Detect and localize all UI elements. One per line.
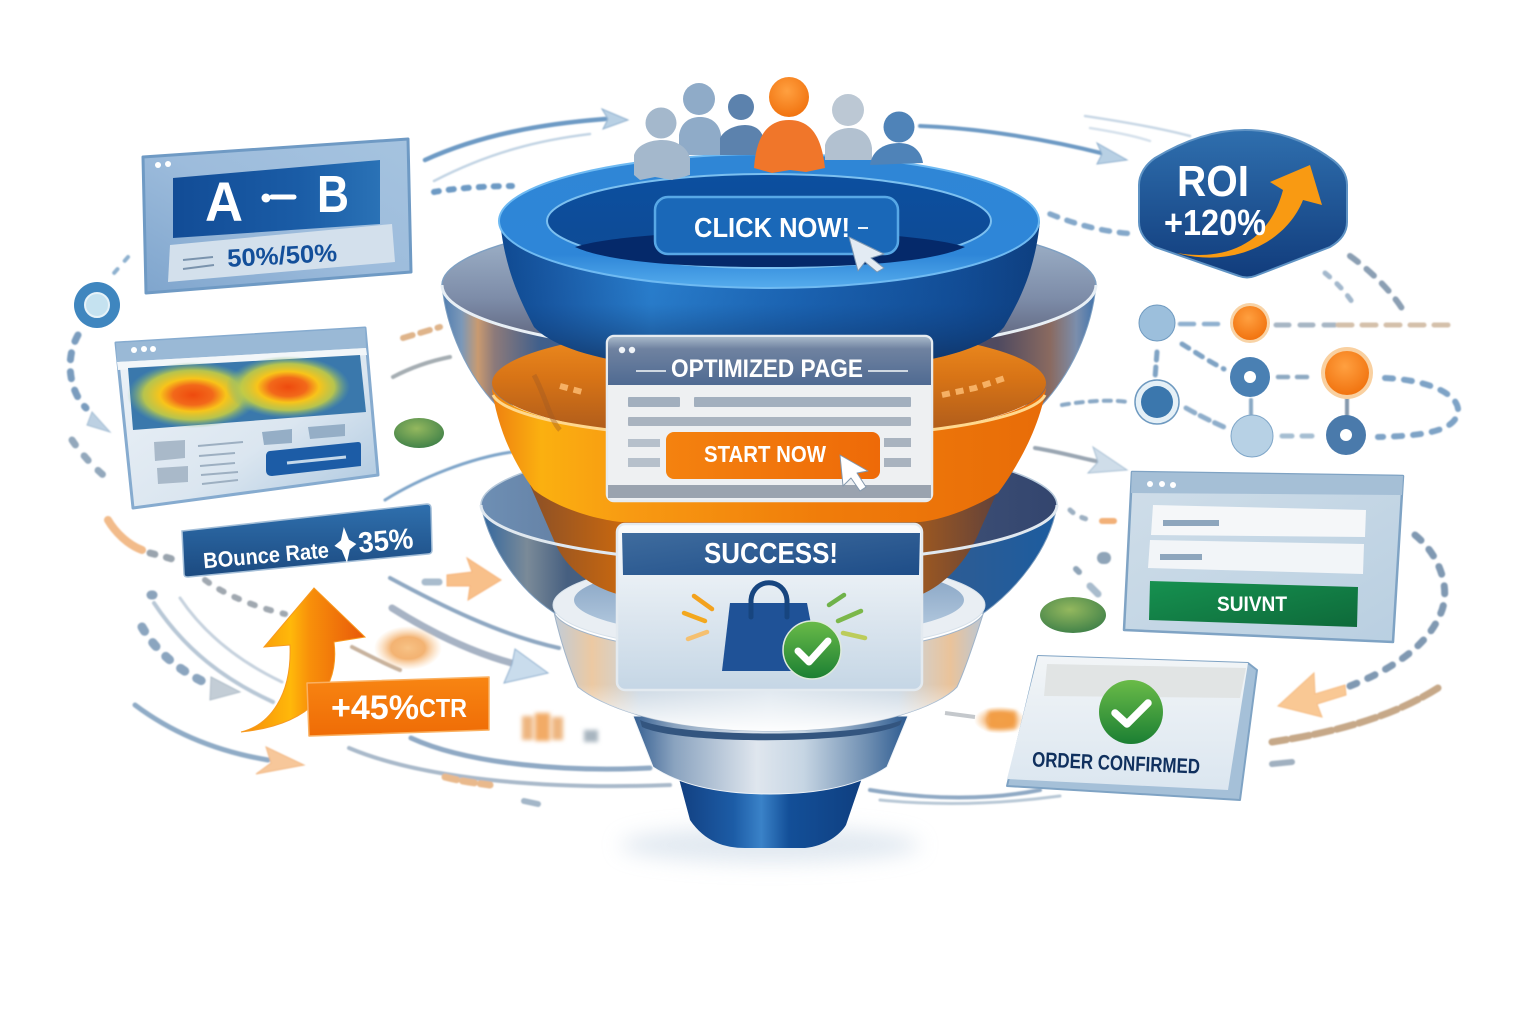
- button: submit: SUIVNT: [1217, 593, 1287, 616]
- arrow: crowd to ROI: [920, 116, 1403, 310]
- panel: form submit: [1124, 472, 1403, 642]
- funnel lower glass ring: [481, 443, 1057, 633]
- panel: heatmap page: [116, 328, 378, 508]
- heatmap: [127, 355, 366, 430]
- button: start now: [666, 432, 880, 491]
- funnel upper glass ring: [442, 215, 1096, 405]
- glow accents and data blocks: [374, 626, 1026, 742]
- panel: A/B test: [143, 139, 411, 293]
- panel: order confirmed: ORDER CONFIRMED: [1032, 748, 1200, 779]
- shadow under funnel: [620, 827, 920, 863]
- badge: CTR: CTR: [419, 693, 467, 723]
- dashed paths: right network: [870, 324, 1458, 803]
- card: success: SUCCESS!: [704, 538, 838, 570]
- button: click now: [655, 197, 898, 272]
- crowd of people: [634, 77, 923, 180]
- arrow: orange growth: [241, 588, 365, 732]
- panel: A/B test: A: [205, 170, 243, 233]
- card: optimized page: [607, 336, 932, 501]
- badge: bounce rate: 35%: [357, 523, 415, 560]
- panel: A/B test: B: [317, 166, 349, 224]
- funnel white bowl: [553, 608, 985, 731]
- badge: bounce rate: [182, 504, 432, 577]
- card: success: [617, 524, 922, 690]
- funnel: [442, 154, 1096, 848]
- panel: A/B test: 50%/50%: [226, 239, 338, 273]
- person: back blue-grey: [679, 83, 721, 155]
- panel: order confirmed: [1007, 656, 1257, 800]
- funnel blue top body: [500, 221, 1040, 372]
- person: blue right: [870, 112, 923, 165]
- dashed loop: left side: [70, 257, 670, 804]
- icon: target circle: [74, 282, 120, 328]
- badge: ROI: [1139, 130, 1347, 278]
- funnel dark orange core: [530, 485, 998, 595]
- icon: shopping bag: [722, 583, 820, 671]
- arrow: top left to crowd: [425, 109, 628, 192]
- badge: CTR: [307, 677, 489, 736]
- badge: bounce rate: BOunce Rate: [202, 537, 330, 573]
- funnel orange bowl: [491, 325, 1047, 522]
- icon: check badge: [1099, 680, 1163, 744]
- icon: cursor: [849, 237, 884, 272]
- badge: ROI: ROI: [1177, 157, 1249, 206]
- badge: ROI: +120%: [1164, 202, 1266, 243]
- button: start now: START NOW: [704, 441, 826, 467]
- button: submit: [1149, 581, 1358, 627]
- flow lines and arrows: [70, 109, 1458, 804]
- funnel inner opening: [547, 174, 991, 268]
- badge: CTR: +45%: [331, 689, 419, 727]
- person: orange leader: [754, 77, 825, 173]
- funnel spout: [678, 775, 863, 848]
- network nodes: [1135, 303, 1373, 457]
- funnel rim: [499, 154, 1039, 288]
- card: optimized page: OPTIMIZED PAGE: [671, 355, 863, 383]
- funnel white bowl rim: [553, 558, 985, 652]
- icon: check: [783, 621, 841, 679]
- arrow: ROI growth: [1177, 165, 1322, 258]
- person: back dark blue: [720, 94, 764, 155]
- person: back grey right: [825, 94, 872, 160]
- funnel steel collar: [633, 716, 908, 794]
- person: front grey left: [634, 108, 690, 180]
- icon: leaf blobs: [394, 418, 1106, 633]
- button: click now: CLICK NOW!: [694, 212, 850, 243]
